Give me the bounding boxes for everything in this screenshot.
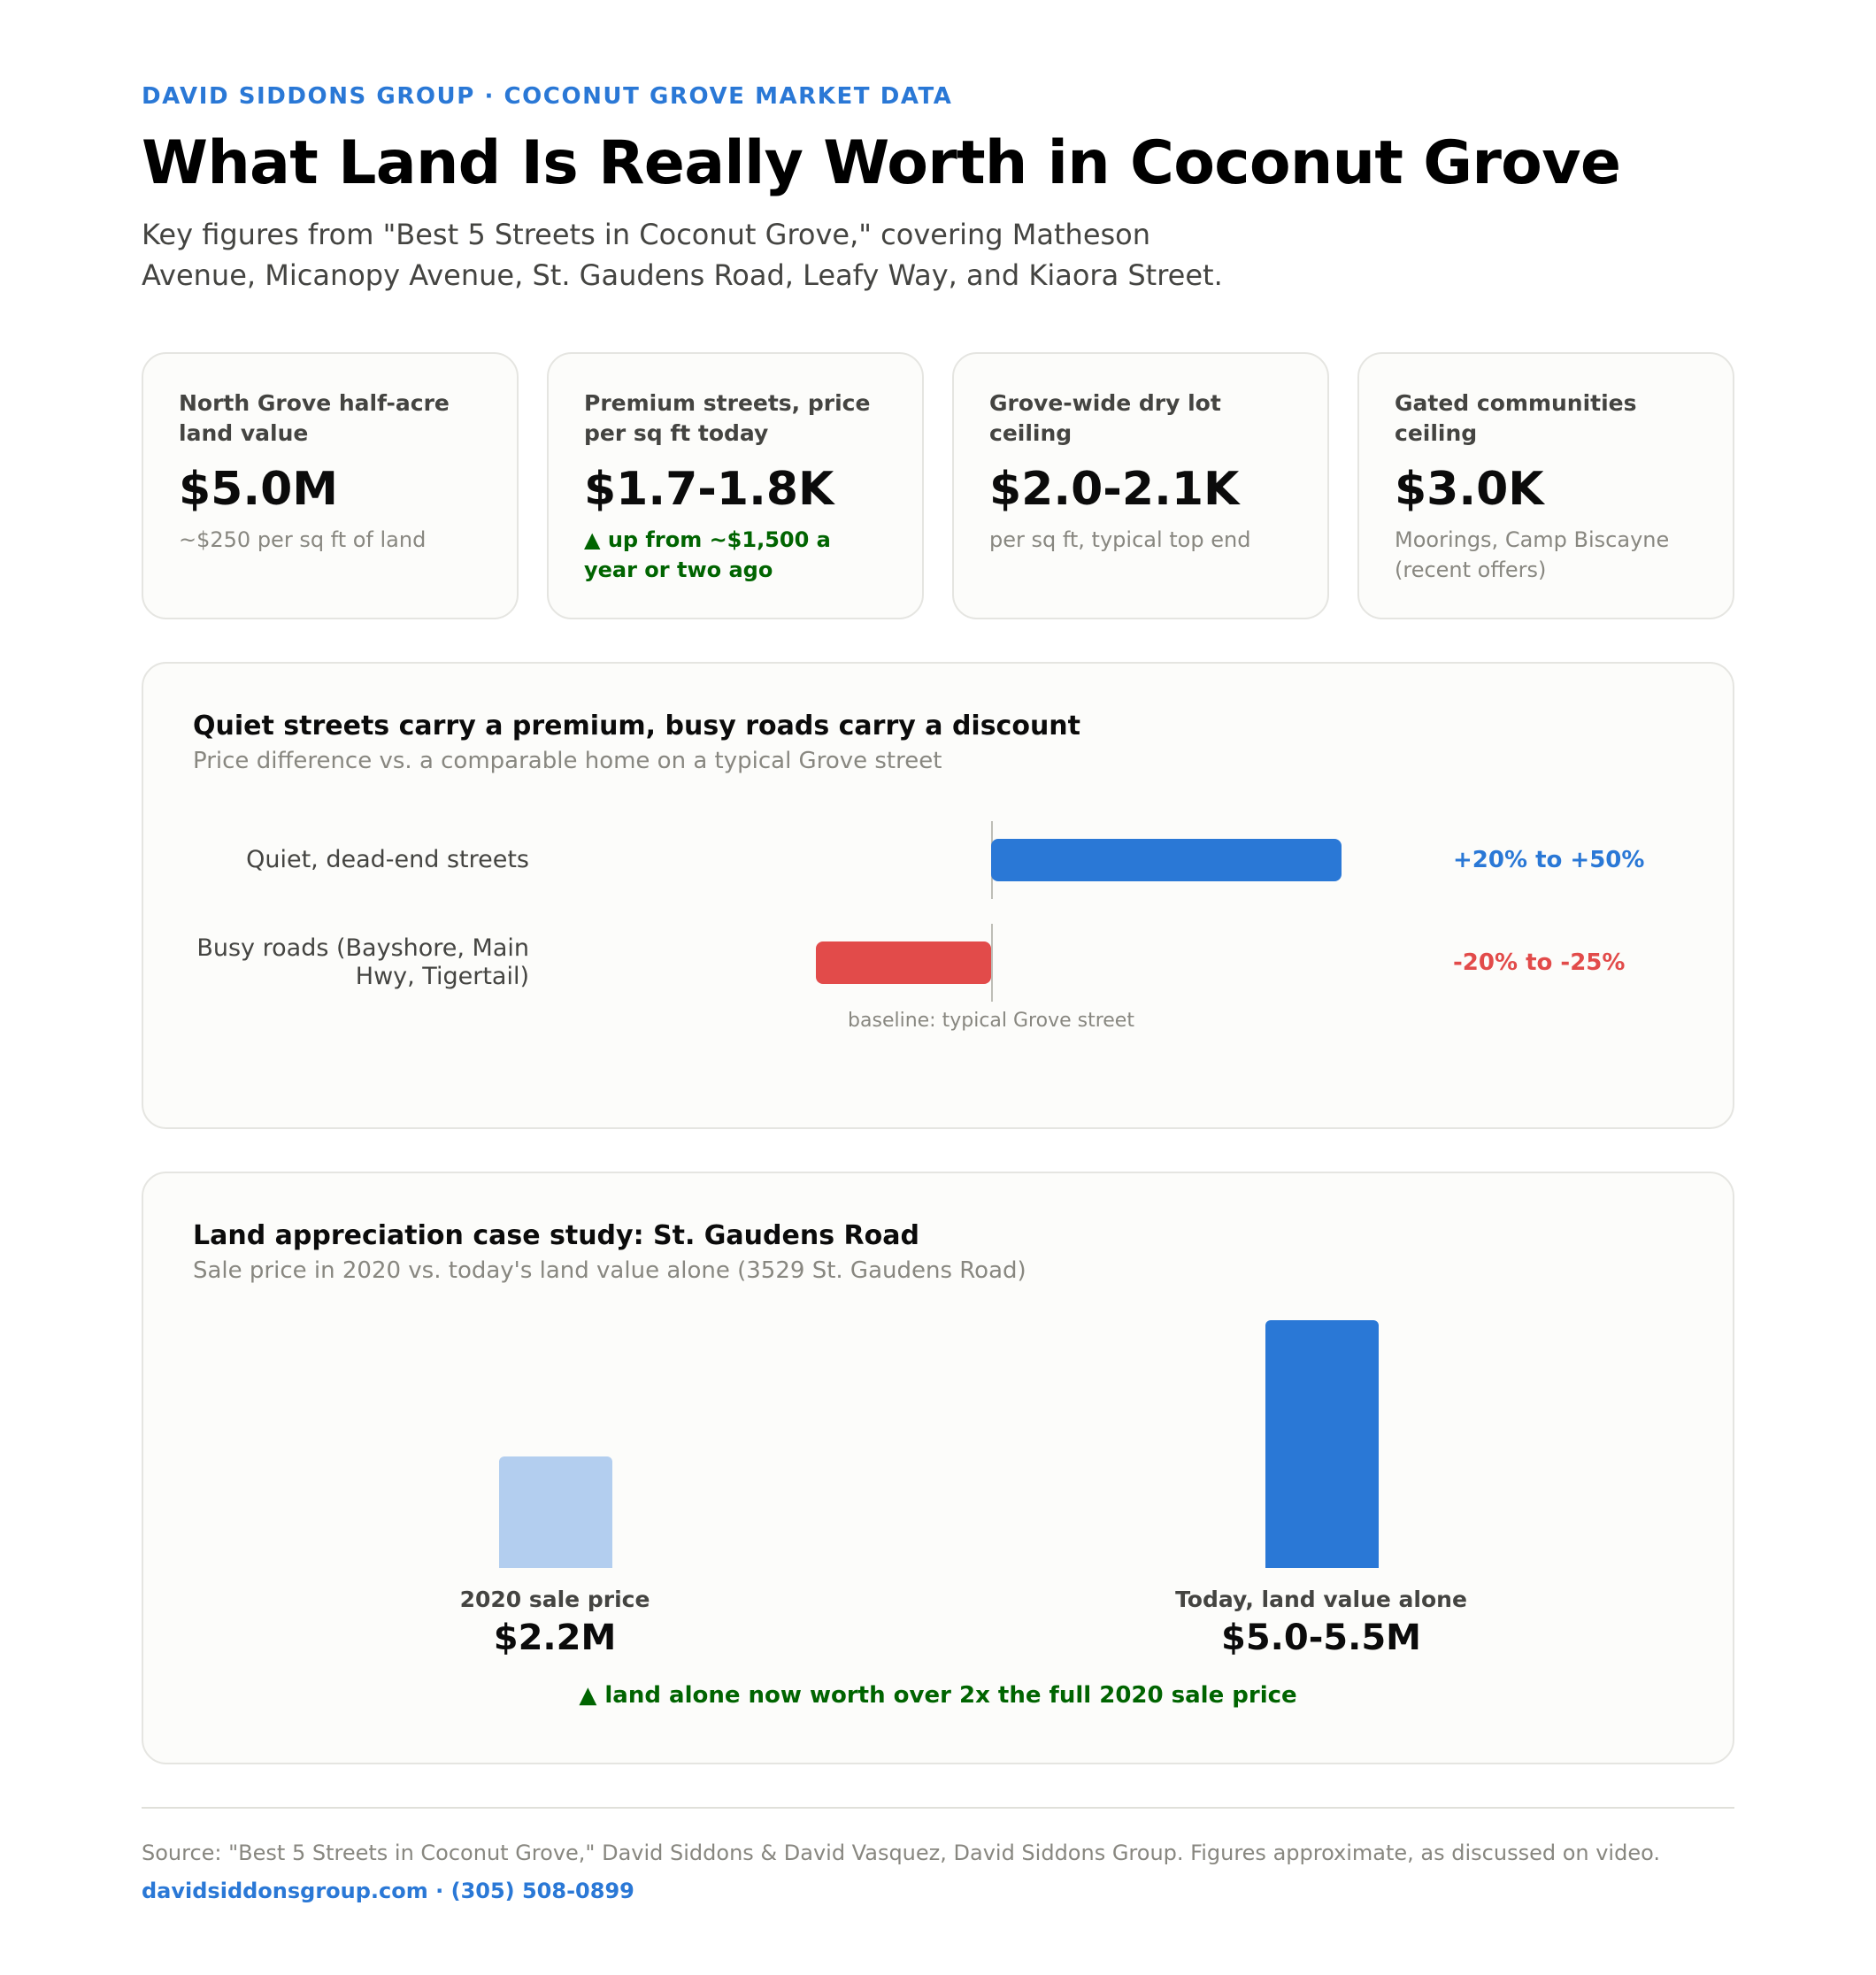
card label: ceiling [1395,420,1477,446]
card note: (recent offers) [1395,557,1546,582]
baseline caption: baseline: typical Grove street [848,1010,1134,1032]
source note: Source: "Best 5 Streets in Coconut Grove," David Siddons & David Vasquez, David Siddons Group. Figures approximate, as discussed on video. [142,1841,1660,1865]
subtitle: Key figures from "Best 5 Streets in Coconut Grove," covering Matheson [142,218,1150,251]
card label [989,390,1221,446]
card label: Grove-wide dry lot [989,390,1221,416]
panel heading: Quiet streets carry a premium, busy roads carry a discount [193,711,1080,742]
bar value: 2020: $2.2M [494,1618,616,1658]
bar: 2020 sale price [499,1456,612,1568]
row label: busy roads: Hwy, Tigertail) [356,963,529,990]
card value: $3.0K [1395,463,1544,516]
card value: $1.7-1.8K [584,463,834,516]
panel subheading: Sale price in 2020 vs. today's land value alone (3529 St. Gaudens Road) [193,1257,1026,1284]
bar: busy roads discount [816,941,991,984]
card note: ~$250 per sq ft of land [179,527,426,552]
bar label: today: Today, land value alone [1175,1587,1467,1612]
card note: per sq ft, typical top end [989,527,1250,552]
contact line: davidsiddonsgroup.com · (305) 508-0899 [142,1879,634,1903]
row label: busy roads: Busy roads (Bayshore, Main [196,934,529,962]
subtitle: Avenue, Micanopy Avenue, St. Gaudens Road, Leafy Way, and Kiaora Street. [142,258,1223,292]
card value: $2.0-2.1K [989,463,1239,516]
card: dry lot ceiling [952,352,1329,619]
card value: $5.0M [179,463,338,516]
card label [1395,390,1637,446]
card label: Gated communities [1395,390,1637,416]
bar: quiet streets premium [991,839,1342,881]
card note: Moorings, Camp Biscayne [1395,527,1669,552]
card label [584,390,870,446]
row label: busy roads [196,934,529,990]
card: premium streets [547,352,924,619]
card note [584,527,831,582]
card: North Grove land value [142,352,519,619]
panel subheading: Price difference vs. a comparable home on a typical Grove street [193,748,942,774]
panel: street premium and discount [142,662,1734,1129]
footer rule [142,1807,1734,1809]
panel heading: Land appreciation case study: St. Gaudens Road [193,1220,919,1251]
card label: North Grove half-acre [179,390,450,416]
bar label: 2020: 2020 sale price [460,1587,650,1612]
comparison note: ▲ land alone now worth over 2x the full 2020 sale price [579,1682,1297,1709]
value: quiet streets: +20% to +50% [1453,847,1644,873]
card label [179,390,450,446]
baseline tick: busy row [991,924,993,1002]
card label: ceiling [989,420,1072,446]
baseline tick: quiet row [991,821,993,899]
card label: Premium streets, price [584,390,870,416]
card note [1395,527,1669,582]
panel: land appreciation case study [142,1172,1734,1764]
title: What Land Is Really Worth in Coconut Grove [142,128,1620,198]
bar value: today: $5.0-5.5M [1221,1618,1421,1658]
card note: year or two ago [584,557,773,582]
eyebrow: DAVID SIDDONS GROUP · COCONUT GROVE MARKET DATA [142,83,952,110]
subtitle [142,218,1223,292]
card label: per sq ft today [584,420,768,446]
card label: land value [179,420,308,446]
bar: today land value [1265,1320,1379,1568]
card note: ▲ up from ~$1,500 a [584,527,831,552]
card: gated communities [1357,352,1734,619]
row label: quiet streets: Quiet, dead-end streets [246,846,529,873]
value: busy roads: -20% to -25% [1453,949,1625,976]
